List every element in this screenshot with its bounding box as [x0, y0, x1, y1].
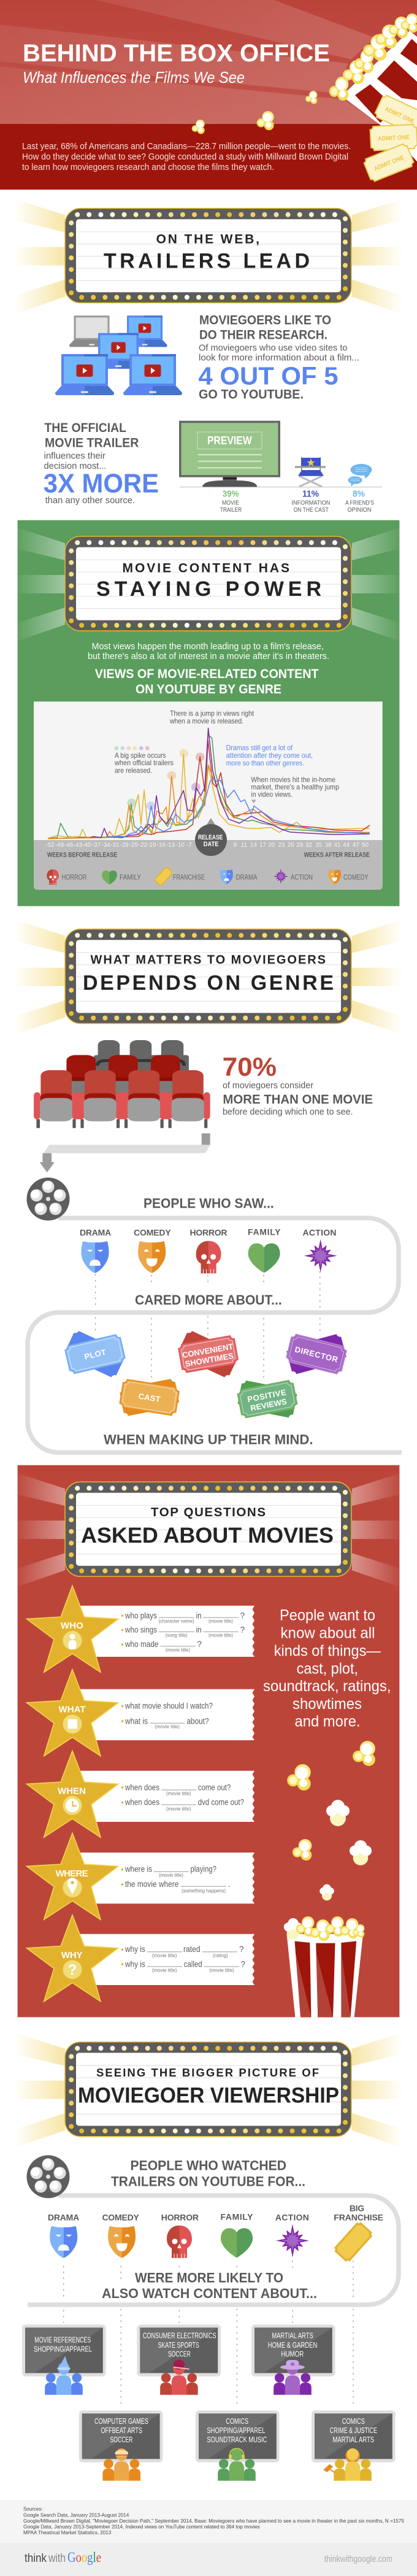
- icon: admit one tickets: [363, 94, 417, 182]
- chart axis: 26: [287, 842, 294, 849]
- question card: who: (character name): [158, 1618, 194, 1624]
- text: official trailer stat: MOVIE TRAILER: [45, 436, 139, 450]
- chart axis: 35: [315, 842, 323, 849]
- text: intro: Most views happen the month leading up to a film's release,: [92, 641, 324, 652]
- panel: sources: Google/Millward Brown Digital, "Moviegoer Decision Path," September 2014, Base: Moviegoers who have planned to see a movie in theater in the past six months, N =1575: [23, 2518, 404, 2524]
- question card: why: WHY: [61, 1950, 82, 1961]
- text: 70% stat: 70%: [223, 1052, 277, 1082]
- heading: when making up their mind: WHEN MAKING UP THEIR MIND.: [104, 1432, 313, 1447]
- release date marker: RELEASE: [198, 834, 223, 841]
- question card: where: where is: [124, 1865, 152, 1874]
- intro text: Last year, 68% of Americans and Canadians—228.7 million people—went to the movies.: [22, 142, 351, 152]
- genre: family: [221, 2212, 253, 2258]
- genre: drama: DRAMA: [80, 1227, 111, 1237]
- chart legend: FRANCHISE: [173, 874, 205, 881]
- chart annotations: are released.: [115, 766, 152, 774]
- intro text: [22, 142, 351, 172]
- text: youtube research stat: [199, 313, 359, 401]
- release date marker: [195, 824, 227, 856]
- genre: big franchise: [334, 2203, 383, 2262]
- question card: where: [26, 1833, 254, 1919]
- question card: why: (movie title): [209, 1967, 234, 1973]
- chart legend: [47, 866, 369, 886]
- callout: people want to know: [263, 1607, 391, 1730]
- label: movie trailer 39%: MOVIE: [222, 499, 239, 506]
- intro text: How do they decide what to see? Google conducted a study with Millward Brown Digital: [22, 152, 348, 162]
- logo: think with google: [25, 2550, 101, 2565]
- intro text: to learn how moviegoers research and choose the films they watch.: [22, 163, 274, 172]
- screen: family: [196, 2410, 280, 2481]
- icon: monitor: PREVIEW: [207, 434, 252, 447]
- callout: people want to know: soundtrack, ratings,: [263, 1678, 391, 1695]
- screen: big franchise: CRIME & JUSTICE: [330, 2426, 377, 2435]
- heading: people who watched: [111, 2158, 305, 2189]
- chart axis: -25: [129, 842, 138, 849]
- question card: when: when does: [124, 1798, 159, 1807]
- chart axis: -46: [64, 842, 74, 849]
- chart annotations: market, there's a healthy jump: [251, 782, 339, 791]
- marquee: on the web, trailers lead: TRAILERS LEAD: [104, 250, 310, 273]
- chart legend: HORROR: [62, 874, 86, 881]
- chart annotations: when official trailers: [114, 758, 174, 767]
- chart axis: -10: [175, 842, 185, 849]
- text: youtube research stat: DO THEIR RESEARCH.: [199, 328, 327, 342]
- chart annotations: [114, 709, 339, 799]
- label: movie trailer 39%: 39%: [223, 488, 239, 499]
- genre: drama: [80, 1227, 111, 1273]
- question card: who: (movie title): [166, 1646, 190, 1652]
- text: official trailer stat: [44, 421, 159, 506]
- question card: why: rated: [183, 1945, 201, 1954]
- question card: when: WHEN: [58, 1786, 86, 1796]
- genre: family: FAMILY: [221, 2212, 253, 2222]
- chart axis: 17: [259, 842, 266, 849]
- icon: admit one tickets: ADMIT ONE: [378, 134, 410, 142]
- text: 70% stat: [223, 1052, 373, 1117]
- text: youtube research stat: Of moviegoers who use video sites to: [199, 343, 347, 353]
- screen: horror: [137, 2324, 221, 2395]
- question card: where: WHERE: [56, 1868, 88, 1879]
- heading: views by genre: [95, 667, 319, 696]
- text: 70% stat: before deciding which one to see.: [223, 1107, 353, 1117]
- logo: think with google: think: [25, 2552, 47, 2565]
- label: friend 8%: A FRIEND'S: [345, 499, 374, 506]
- chart legend: FAMILY: [120, 874, 141, 881]
- chart legend: DRAMA: [236, 874, 258, 881]
- genre: comedy: [102, 2212, 139, 2258]
- label: cast 11%: [292, 488, 330, 514]
- genre: big franchise: BIG: [350, 2203, 364, 2213]
- question card: why: (rating): [213, 1952, 228, 1958]
- screen: comedy: [79, 2410, 163, 2481]
- question card: when: (movie title): [166, 1805, 191, 1811]
- screen: horror: SKATE SPORTS: [158, 2340, 199, 2350]
- text: official trailer stat: influences their: [44, 451, 105, 461]
- chart annotations: Dramas still get a lot of: [226, 744, 293, 752]
- chart axis: -40: [82, 842, 91, 849]
- ticket: convenient showtimes: SHOWTIMES: [185, 1351, 234, 1368]
- track: viewership flow: [28, 2196, 399, 2305]
- genre: family: [248, 1227, 281, 1273]
- chart axis: -31: [110, 842, 120, 849]
- ticket: positive reviews: POSITIVE: [247, 1387, 287, 1404]
- chart annotations: when a movie is released.: [169, 717, 243, 725]
- question card: who: WHO: [61, 1621, 83, 1631]
- question card: who: ?: [197, 1640, 202, 1649]
- question card: what: (movie title): [155, 1724, 180, 1730]
- icon: loose popcorn: [192, 91, 317, 134]
- screen: family: SOUNDTRACK MUSIC: [207, 2435, 267, 2444]
- question card: why: ?: [240, 1959, 245, 1969]
- genre: action: [275, 2212, 309, 2257]
- marquee: depends on genre: WHAT MATTERS TO MOVIEGOERS: [91, 954, 326, 967]
- callout: people want to know: showtimes: [293, 1695, 362, 1713]
- genre: family: FAMILY: [248, 1227, 281, 1236]
- question card: who: in: [196, 1625, 202, 1635]
- chart axis: -19: [147, 842, 156, 849]
- question card: why: ?: [239, 1945, 244, 1954]
- marquee: top questions: ASKED ABOUT MOVIES: [81, 1524, 334, 1548]
- text: intro: [88, 641, 329, 661]
- genre: action: [303, 1227, 337, 1273]
- marquee: staying power: MOVIE CONTENT HAS: [123, 561, 289, 575]
- marquee: depends on genre: [13, 919, 404, 1035]
- callout: people want to know: cast, plot,: [297, 1660, 358, 1677]
- chart annotations: When movies hit the in-home: [251, 775, 335, 784]
- screen: family: COMICS: [226, 2416, 248, 2426]
- arrow: seats to reel: [40, 1133, 210, 1173]
- ticket: convenient showtimes: [177, 1329, 240, 1379]
- logo: think with google: with: [48, 2552, 66, 2565]
- marquee: top questions: [13, 1472, 404, 1588]
- question card: when: dvd come out?: [198, 1798, 244, 1807]
- marquee: top questions: TOP QUESTIONS: [151, 1505, 266, 1519]
- screen: comedy: COMPUTER GAMES: [94, 2416, 148, 2426]
- screen: horror: SOCCER: [168, 2350, 191, 2359]
- question card: what: [26, 1670, 254, 1756]
- question card: where: playing?: [190, 1865, 216, 1874]
- chart annotations: A big spike occurs: [115, 751, 166, 760]
- callout: people want to know: know about all: [281, 1624, 375, 1641]
- genre: horror: [190, 1227, 227, 1273]
- text: official trailer stat: 3X MORE: [44, 469, 159, 499]
- chart axis: -52: [45, 842, 55, 849]
- question card: why: (movie title): [152, 1967, 177, 1973]
- subtitle: What Influences the Films We See: [23, 68, 245, 87]
- question card: when: (movie title): [166, 1791, 191, 1797]
- icon: theater seats: [34, 1040, 210, 1128]
- text: 70% stat: of moviegoers consider: [223, 1080, 313, 1090]
- question card: what: what is: [124, 1716, 148, 1726]
- icon: admit one tickets: ADMIT ONE: [383, 106, 416, 125]
- genre: big franchise: FRANCHISE: [334, 2212, 383, 2222]
- question card: why: why is: [124, 1959, 145, 1969]
- heading: people who watched: TRAILERS ON YOUTUBE FOR...: [111, 2174, 305, 2189]
- heading: were more likely: WERE MORE LIKELY TO: [135, 2270, 283, 2285]
- genre: horror: HORROR: [190, 1227, 227, 1237]
- label: cast 11%: INFORMATION: [292, 499, 330, 506]
- label: friend 8%: OPINION: [347, 506, 372, 514]
- dotted connectors: [64, 2255, 353, 2407]
- callout: people want to know: People want to: [280, 1607, 375, 1624]
- chart: monitor pictograph: [179, 421, 382, 514]
- track: genre flow: [28, 1218, 402, 1452]
- icon: admit one tickets: ADMIT ONE: [373, 154, 405, 172]
- icon: film reel: [27, 1178, 70, 1221]
- screen: action: [251, 2324, 335, 2395]
- screen: horror: CONSUMER ELECTRONICS: [143, 2331, 216, 2340]
- chart legend: ACTION: [291, 874, 313, 881]
- marquee: on the web, trailers lead: ON THE WEB,: [156, 233, 259, 247]
- chart axis: 14: [250, 842, 257, 849]
- icon: laptops: [55, 315, 182, 395]
- chart: views by genre: [34, 701, 383, 890]
- chart axis: 8: [234, 842, 237, 849]
- screen: big franchise: [312, 2410, 396, 2481]
- screen: big franchise: COMICS: [342, 2416, 365, 2426]
- question card: where: the movie where: [125, 1880, 178, 1889]
- heading: were more likely: [102, 2270, 317, 2301]
- text: youtube research stat: 4 OUT OF 5: [199, 362, 339, 390]
- text: official trailer stat: decision most...: [44, 461, 107, 471]
- chart axis: 41: [334, 842, 341, 849]
- heading: cared more about: CARED MORE ABOUT...: [135, 1292, 282, 1308]
- marquee: moviegoer viewership: MOVIEGOER VIEWERSHIP: [78, 2084, 339, 2108]
- icon: film reel: [27, 2155, 70, 2198]
- genre: action: ACTION: [275, 2212, 309, 2222]
- chart axis: 38: [325, 842, 332, 849]
- screen: comedy: SOCCER: [110, 2435, 132, 2444]
- screen: action: HUMOR: [281, 2350, 304, 2359]
- question card: who: who made: [124, 1640, 158, 1649]
- question card: who: (movie title): [208, 1618, 233, 1624]
- question card: why: why is: [124, 1945, 145, 1954]
- text: intro: but there's also a lot of interest in a movie after it's in theaters.: [88, 651, 329, 661]
- panel: sources: Google Data, January 2013-September 2014, Indexed views on YouTube content related to 364 top movies: [23, 2524, 260, 2530]
- question card: who: [26, 1586, 254, 1672]
- text: official trailer stat: THE OFFICIAL: [44, 421, 126, 435]
- screen: comedy: OFFBEAT ARTS: [101, 2426, 142, 2435]
- footer url: thinkwithgoogle.com: [324, 2554, 392, 2564]
- question card: why: called: [184, 1959, 202, 1969]
- question card: who: (movie title): [208, 1632, 233, 1638]
- question card: when: come out?: [198, 1783, 231, 1792]
- icon: monitor: [179, 421, 280, 487]
- chart axis: -16: [157, 842, 166, 849]
- chart axis: -22: [139, 842, 148, 849]
- screen: big franchise: MARTIAL ARTS: [332, 2435, 374, 2444]
- ticket: cast: CAST: [138, 1392, 161, 1404]
- panel: top questions: [13, 1465, 404, 2017]
- chart annotations: attention after they come out,: [226, 751, 313, 760]
- genre: drama: [48, 2212, 79, 2258]
- panel: sources: [0, 2500, 417, 2543]
- marquee: staying power: [13, 526, 404, 642]
- axis caption: after: WEEKS AFTER RELEASE: [304, 852, 370, 859]
- genre: comedy: [134, 1227, 171, 1273]
- question card: where: (something happens): [182, 1888, 226, 1894]
- question card: why: (movie title): [152, 1952, 177, 1958]
- panel: sources: Google Search Data, January 2013-August 2014: [23, 2512, 129, 2518]
- chart annotations: more so than other genres.: [226, 758, 304, 767]
- heading: people who watched: PEOPLE WHO WATCHED: [130, 2158, 286, 2173]
- text: youtube research stat: look for more information about a film...: [199, 352, 359, 363]
- callout: people want to know: and more.: [294, 1713, 361, 1730]
- heading: people who saw: PEOPLE WHO SAW...: [143, 1195, 274, 1211]
- ticket: positive reviews: [237, 1380, 298, 1418]
- icon: speech bubbles: [348, 464, 372, 487]
- chart axis: [45, 842, 369, 849]
- label: friend 8%: [345, 488, 374, 514]
- chart axis: -7: [186, 842, 192, 849]
- panel: sources: Sources:: [23, 2506, 42, 2512]
- icon: director chair: [295, 457, 326, 487]
- screen: drama: MOVIE REFERENCES: [34, 2335, 91, 2345]
- question card: where: (movie title): [159, 1872, 183, 1878]
- chart axis: 50: [362, 842, 369, 849]
- icon: popcorn box: [329, 13, 417, 161]
- chart highlights: [114, 746, 205, 810]
- ticket: cast: [119, 1378, 180, 1417]
- question card: who: who sings: [124, 1625, 157, 1635]
- marquee: on the web, trailers lead: [13, 199, 404, 314]
- genre: horror: HORROR: [161, 2212, 199, 2222]
- genre: comedy: COMEDY: [134, 1227, 171, 1237]
- ticket: director: [286, 1333, 347, 1375]
- heading: views by genre: VIEWS OF MOVIE-RELATED CONTENT: [95, 667, 319, 681]
- question card: who: ?: [240, 1625, 245, 1635]
- callout: people want to know: kinds of things—: [274, 1642, 381, 1659]
- screen: action: HOME & GARDEN: [268, 2340, 317, 2350]
- chart axis: 29: [296, 842, 304, 849]
- question card: what: what movie should I watch?: [124, 1702, 213, 1711]
- ticket: director: DIRECTOR: [294, 1344, 339, 1364]
- label: cast 11%: ON THE CAST: [294, 506, 329, 514]
- genre: drama: DRAMA: [48, 2212, 79, 2222]
- question card: why: ?: [68, 1962, 77, 1978]
- dotted connectors: [96, 1271, 320, 1378]
- question card: what: WHAT: [59, 1705, 86, 1714]
- ticket: positive reviews: REVIEWS: [250, 1397, 288, 1413]
- question card: who: in: [196, 1611, 202, 1620]
- icon: falling popcorn: [287, 1741, 375, 1900]
- label: movie trailer 39%: TRAILER: [220, 506, 242, 514]
- ticket: plot: [64, 1329, 126, 1379]
- chart annotations: in video views.: [251, 790, 293, 799]
- marquee: moviegoer viewership: [13, 2032, 404, 2148]
- genre: comedy: COMEDY: [102, 2212, 139, 2222]
- chart axis: -13: [166, 842, 175, 849]
- panel: sources: MPAA Theatrical Market Statistics, 2013: [23, 2529, 112, 2536]
- text: youtube research stat: GO TO YOUTUBE.: [199, 387, 304, 401]
- chart annotations: There is a jump in views right: [170, 709, 254, 718]
- marquee: staying power: STAYING POWER: [96, 577, 321, 601]
- question card: why: [26, 1915, 254, 2002]
- screen: action: MARTIAL ARTS: [272, 2331, 313, 2340]
- logo: think with google: Google: [67, 2550, 101, 2565]
- label: movie trailer 39%: [220, 488, 242, 514]
- chart legend: COMEDY: [343, 874, 369, 881]
- question card: who: ?: [240, 1611, 245, 1620]
- label: friend 8%: 8%: [353, 488, 365, 499]
- question card: when: [26, 1751, 254, 1837]
- icon: popcorn bucket: [284, 1916, 364, 2017]
- footer: [0, 2543, 417, 2576]
- screen: drama: SHOPPING/APPAREL: [34, 2345, 92, 2354]
- genre: action: ACTION: [303, 1227, 336, 1237]
- chart axis: 11: [241, 842, 248, 849]
- chart axis: -28: [120, 842, 129, 849]
- question card: where: .: [228, 1880, 231, 1889]
- chart axis: 32: [305, 842, 312, 849]
- screen: family: SHOPPING/APPAREL: [207, 2426, 265, 2435]
- chart axis: 44: [343, 842, 350, 849]
- axis caption: before: WEEKS BEFORE RELEASE: [47, 852, 117, 859]
- question card: what: about?: [186, 1716, 208, 1726]
- title: BEHIND THE BOX OFFICE: [23, 40, 330, 67]
- genre: horror: [161, 2212, 199, 2258]
- label: cast 11%: 11%: [302, 488, 319, 499]
- panel: header: [0, 0, 417, 190]
- chart axis: 20: [268, 842, 275, 849]
- heading: views by genre: ON YOUTUBE BY GENRE: [136, 682, 281, 696]
- chart axis: 23: [278, 842, 285, 849]
- text: 70% stat: MORE THAN ONE MOVIE: [223, 1092, 373, 1106]
- screen: drama: [22, 2324, 106, 2395]
- text: official trailer stat: than any other source.: [45, 495, 135, 506]
- release date marker: DATE: [204, 841, 218, 848]
- chart axis: -34: [101, 842, 110, 849]
- ticket: plot: PLOT: [83, 1348, 107, 1362]
- question card: who: (song title): [166, 1632, 188, 1638]
- question card: when: when does: [124, 1783, 159, 1792]
- ticket: convenient showtimes: CONVENIENT: [182, 1342, 234, 1360]
- marquee: depends on genre: DEPENDS ON GENRE: [83, 971, 334, 995]
- text: youtube research stat: MOVIEGOERS LIKE TO: [199, 313, 331, 327]
- chart axis: -37: [92, 842, 101, 849]
- chart axis: -43: [74, 842, 83, 849]
- chart axis: -49: [55, 842, 64, 849]
- heading: were more likely: ALSO WATCH CONTENT ABOUT...: [102, 2286, 317, 2301]
- marquee: moviegoer viewership: SEEING THE BIGGER PICTURE OF: [96, 2066, 319, 2079]
- panel: staying power: [13, 520, 404, 906]
- chart axis: 47: [353, 842, 359, 849]
- question card: who: who plays: [124, 1611, 157, 1620]
